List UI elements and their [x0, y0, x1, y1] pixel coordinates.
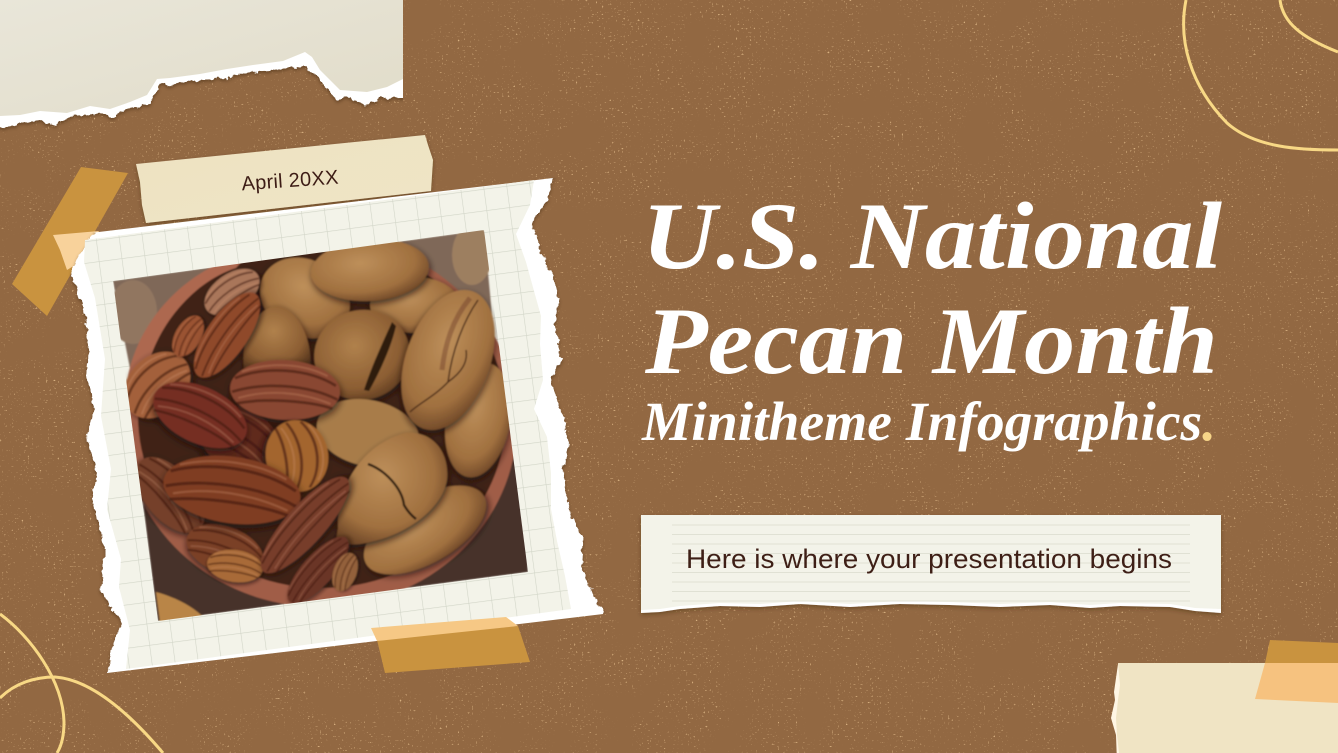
photo: bowl of pecans: [109, 225, 528, 622]
title: [641, 183, 1223, 452]
decorative curves: top right: [1184, 0, 1338, 150]
washi tape: bottom of photo: [371, 617, 530, 673]
bowl rim: [130, 268, 514, 604]
decorative curves: bottom left: [0, 614, 163, 753]
title: U.S. National: [642, 183, 1223, 289]
tape: [1265, 640, 1338, 663]
photo backdrop: [113, 230, 493, 368]
torn grid paper photo frame: [71, 170, 610, 685]
title: Pecan Month: [644, 288, 1218, 394]
torn paper: top left: [0, 0, 420, 127]
title: Minitheme Infographics.: [641, 391, 1216, 452]
date label: April 20XX: [241, 167, 339, 195]
torn lined subtitle paper: [641, 515, 1221, 613]
pecan kernels: [194, 403, 274, 464]
date tape: [136, 135, 433, 223]
torn paper and tape: bottom right: [1111, 640, 1338, 753]
subtitle: Here is where your presentation begins: [686, 544, 1172, 574]
loose nuts outside the bowl: [114, 280, 157, 344]
whole pecans: [439, 362, 512, 485]
washi tape: top left of photo: [12, 167, 128, 316]
